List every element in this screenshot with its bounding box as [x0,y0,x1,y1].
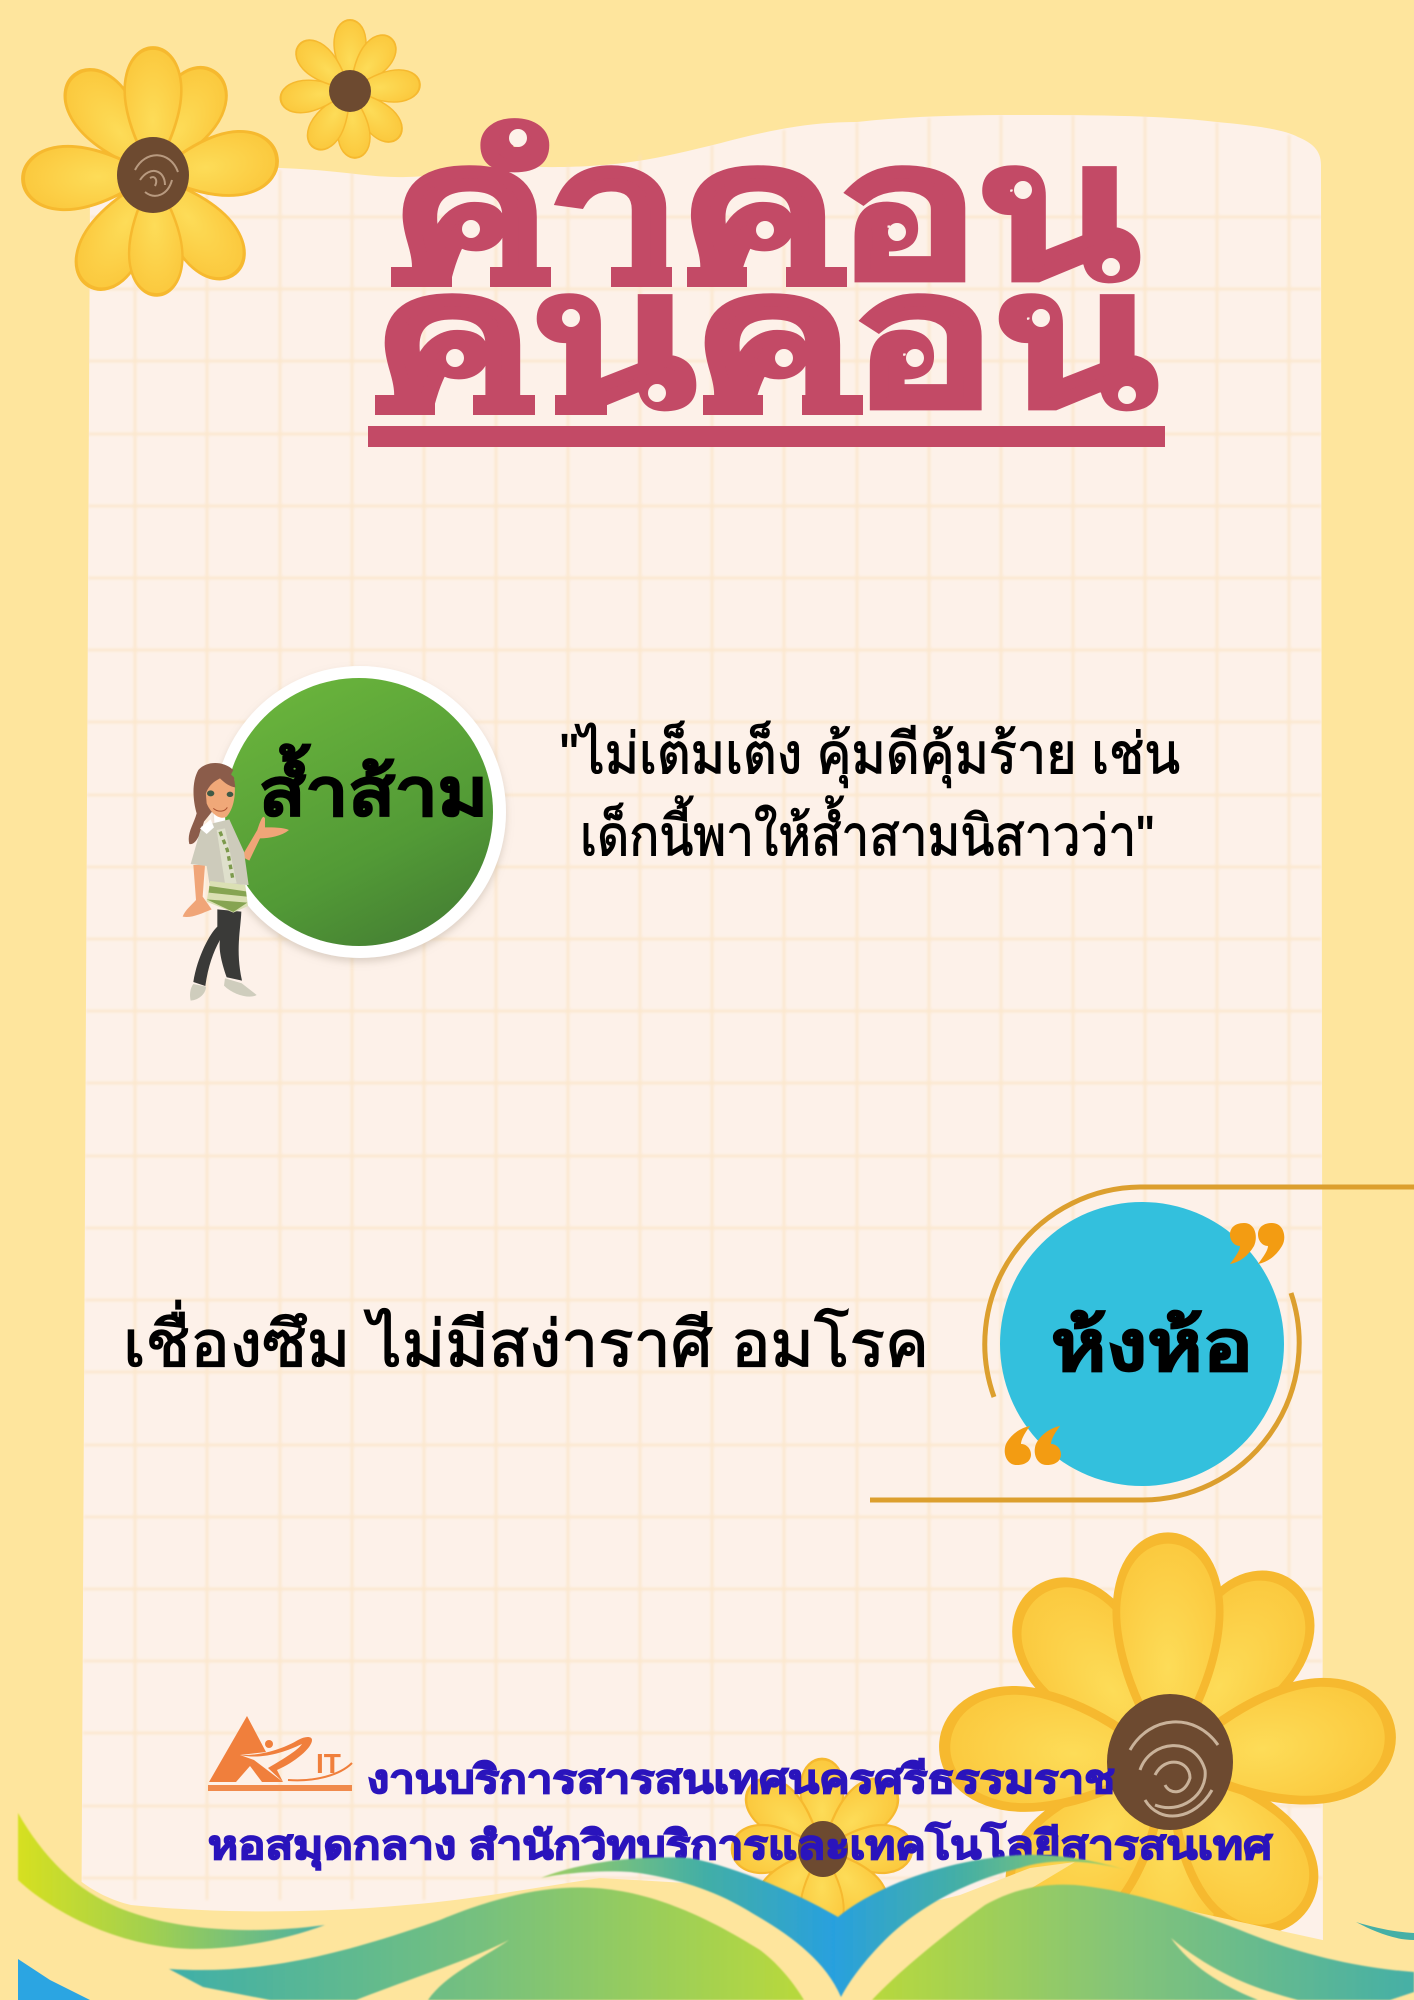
icon: large flower bottom right [940,1538,1398,1972]
icon: small flower top [278,20,421,159]
title underline [368,426,1165,447]
logo: A2IT: IT [316,1748,341,1779]
circle: green term badge [214,666,506,958]
definition: blue term: เชื่องซึม ไม่มีสง่าราศี อมโรค [123,1300,929,1380]
wave: left hill [169,1887,804,2000]
footer text [208,1758,1273,1871]
title line 2: คนคอน [374,239,1156,445]
logo: A2IT [208,1716,352,1791]
icon: woman presenting [183,763,289,1001]
title line 1: คำคอน [392,111,1138,317]
icon: closing quote mark [1230,1223,1284,1264]
icon: middle flower bottom [732,1759,912,1939]
term: blue badge label: ห้งห้อ [1051,1309,1253,1386]
wave: right hill [872,1885,1414,2000]
wave: right sliver [1356,1922,1414,1940]
wave: left crescent [18,1813,325,1949]
wave: blue corner [18,1959,90,2000]
footer line 2: หอสมุดกลาง สำนักวิทบริการและเทคโนโลยีสารสนเทศ [208,1822,1273,1871]
bottom waves [0,1780,1414,2000]
frame: orange quote frame [870,1187,1414,1500]
title [374,111,1156,445]
wave: central blue arcs [541,1855,1126,1997]
definition line 1: "ไม่เต็มเต็ง คุ้มดีคุ้มร้าย เช่น [560,720,1180,788]
term: green badge label: ส้ำส้าม [259,743,488,830]
cream ground under right hill [860,1895,1414,2000]
definition: green term [560,720,1180,867]
icon: opening quote mark [1005,1426,1061,1465]
definition line 2: เด็กนี้พาให้ส้ำสามนิสาวว่า" [580,796,1154,867]
circle: blue term badge [1000,1202,1284,1486]
cream ground left [0,1780,1075,2000]
footer line 1: งานบริการสารสนเทศนครศรีธรรมราช [367,1758,1115,1802]
icon: large flower top left [22,48,281,301]
